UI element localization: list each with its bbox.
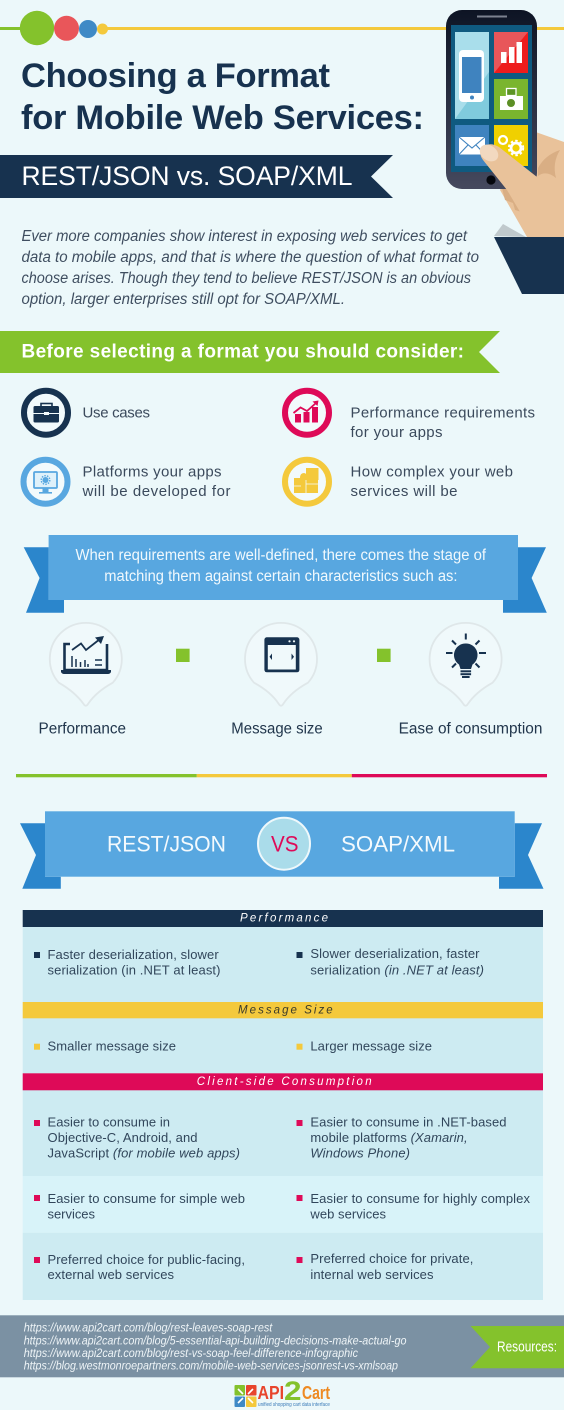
consideration: performance requirements: Performance requirements [350, 404, 535, 421]
resources band [0, 1315, 564, 1377]
comparison table: client-side consumption: Easier to consume for simple web [48, 1191, 245, 1206]
logo: API2Cart [234, 1376, 330, 1408]
resources band: https://blog.westmonroepartners.com/mobile-web-services-jsonrest-vs-xmlsoap [24, 1359, 398, 1373]
comparison table: client-side consumption: services [48, 1206, 96, 1221]
logo: API2Cart: unified shopping cart data interface [258, 1402, 330, 1408]
comparison table: client-side consumption: Easier to consume in [48, 1115, 170, 1130]
consideration: use cases [24, 391, 150, 435]
resources band: https://www.api2cart.com/blog/rest-leaves-soap-rest [24, 1321, 273, 1335]
logo mark [234, 1385, 256, 1407]
consideration: complexity [285, 460, 513, 504]
separator square [176, 649, 190, 662]
VS badge [258, 818, 310, 870]
consideration: use cases: Use cases [82, 404, 150, 421]
separator square [377, 649, 391, 662]
logo: API2Cart: Cart [302, 1383, 330, 1403]
intro paragraph: data to mobile apps, and that is where the question of what format to [22, 249, 479, 266]
comparison table: client-side consumption: JavaScript (for mobile web apps) [48, 1145, 240, 1160]
resources band: https://www.api2cart.com/blog/5-essential-api-building-decisions-make-actual-go [24, 1333, 407, 1347]
characteristic: ease of consumption [399, 623, 542, 737]
title: for Mobile Web Services: [21, 99, 424, 137]
section header: Client-side Consumption [197, 1076, 372, 1088]
resources tag [470, 1326, 564, 1368]
comparison table: client-side consumption: Easier to consume for highly complex [310, 1191, 530, 1206]
green heading ribbon [0, 331, 500, 373]
consideration: complexity: services will be [350, 483, 458, 500]
intro paragraph: choose arises. Though they tend to believe REST/JSON is an obvious [22, 270, 471, 287]
comparison table: message size: Smaller message size [48, 1039, 176, 1054]
header timeline with dots [0, 11, 564, 45]
comparison table: performance [23, 910, 543, 1002]
comparison table: client-side consumption: Preferred choice for private, [310, 1251, 473, 1266]
title: Choosing a Format [21, 57, 330, 95]
comparison table: message size: Larger message size [310, 1039, 432, 1054]
comparison table: client-side consumption: mobile platforms (Xamarin, [310, 1130, 468, 1145]
consideration: performance requirements: for your apps [350, 424, 442, 441]
versus ribbon [20, 811, 544, 889]
blue ribbon callout: matching them against certain characteristics such as: [104, 568, 458, 585]
section header [23, 1073, 543, 1090]
blue ribbon callout: When requirements are well-defined, there comes the stage of [76, 547, 487, 564]
thumb [477, 141, 564, 237]
section header: Message Size [238, 1004, 333, 1016]
comparison table: client-side consumption: internal web services [310, 1267, 434, 1282]
versus ribbon: REST/JSON [107, 831, 226, 856]
title [21, 57, 424, 137]
consideration: platforms: Platforms your apps [82, 464, 222, 481]
comparison table: message size [23, 1002, 543, 1073]
logo: API2Cart: API [258, 1383, 284, 1403]
comparison table: performance: serialization (in .NET at least) [310, 962, 484, 977]
tricolour divider [16, 774, 547, 777]
characteristic: message size [231, 623, 323, 737]
resources band: https://www.api2cart.com/blog/rest-vs-soap-feel-difference-infographic [24, 1346, 358, 1360]
section header [23, 910, 543, 927]
comparison table: performance: serialization (in .NET at least) [48, 962, 220, 977]
icon: briefcase [24, 391, 68, 435]
comparison table: client-side consumption: Objective-C, Android, and [48, 1130, 198, 1145]
comparison table: client-side consumption: Windows Phone) [310, 1145, 410, 1160]
consideration: performance requirements [285, 391, 535, 441]
comparison table: performance: Faster deserialization, slower [48, 947, 219, 962]
characteristic: ease of consumption: Ease of consumption [399, 720, 542, 737]
subtitle ribbon: REST/JSON vs. SOAP/XML [22, 161, 352, 191]
comparison table: client-side consumption: Preferred choice for public-facing, [48, 1252, 245, 1267]
characteristic: message size: Message size [231, 720, 323, 737]
subtitle ribbon [0, 155, 393, 198]
logo: API2Cart: 2 [284, 1376, 302, 1406]
comparison table: performance: Slower deserialization, faster [310, 946, 480, 961]
characteristic: performance: Performance [38, 720, 126, 737]
blue ribbon callout [24, 535, 547, 613]
shirt sleeve [494, 224, 564, 294]
comparison table: client-side consumption: Easier to consume in .NET-based [310, 1115, 506, 1130]
icon pin: window [245, 623, 317, 706]
section header: Performance [240, 912, 328, 924]
characteristic: performance [38, 623, 126, 737]
consideration: complexity: How complex your web [350, 464, 513, 481]
section header [23, 1002, 543, 1018]
icon: puzzle [285, 460, 329, 504]
consideration: platforms: will be developed for [82, 483, 230, 500]
comparison table: client-side consumption: web services [309, 1206, 386, 1221]
icon pin: laptop chart [50, 623, 122, 706]
icon pin: light bulb [430, 623, 502, 706]
illustration: hand holding phone [446, 10, 564, 294]
green heading ribbon: Before selecting a format you should consider: [22, 342, 464, 362]
versus ribbon: SOAP/XML [341, 831, 455, 856]
icon: monitor with gear [24, 460, 68, 504]
intro paragraph [22, 228, 479, 308]
intro paragraph: Ever more companies show interest in exposing web services to get [22, 228, 468, 245]
comparison table: client-side consumption [23, 1073, 543, 1300]
intro paragraph: option, larger enterprises still opt for SOAP/XML. [22, 291, 345, 308]
consideration: platforms [24, 460, 230, 504]
comparison table: client-side consumption: external web services [48, 1267, 174, 1282]
VS badge: VS [271, 831, 298, 856]
icon: rising chart [285, 391, 329, 435]
phone [446, 10, 537, 189]
